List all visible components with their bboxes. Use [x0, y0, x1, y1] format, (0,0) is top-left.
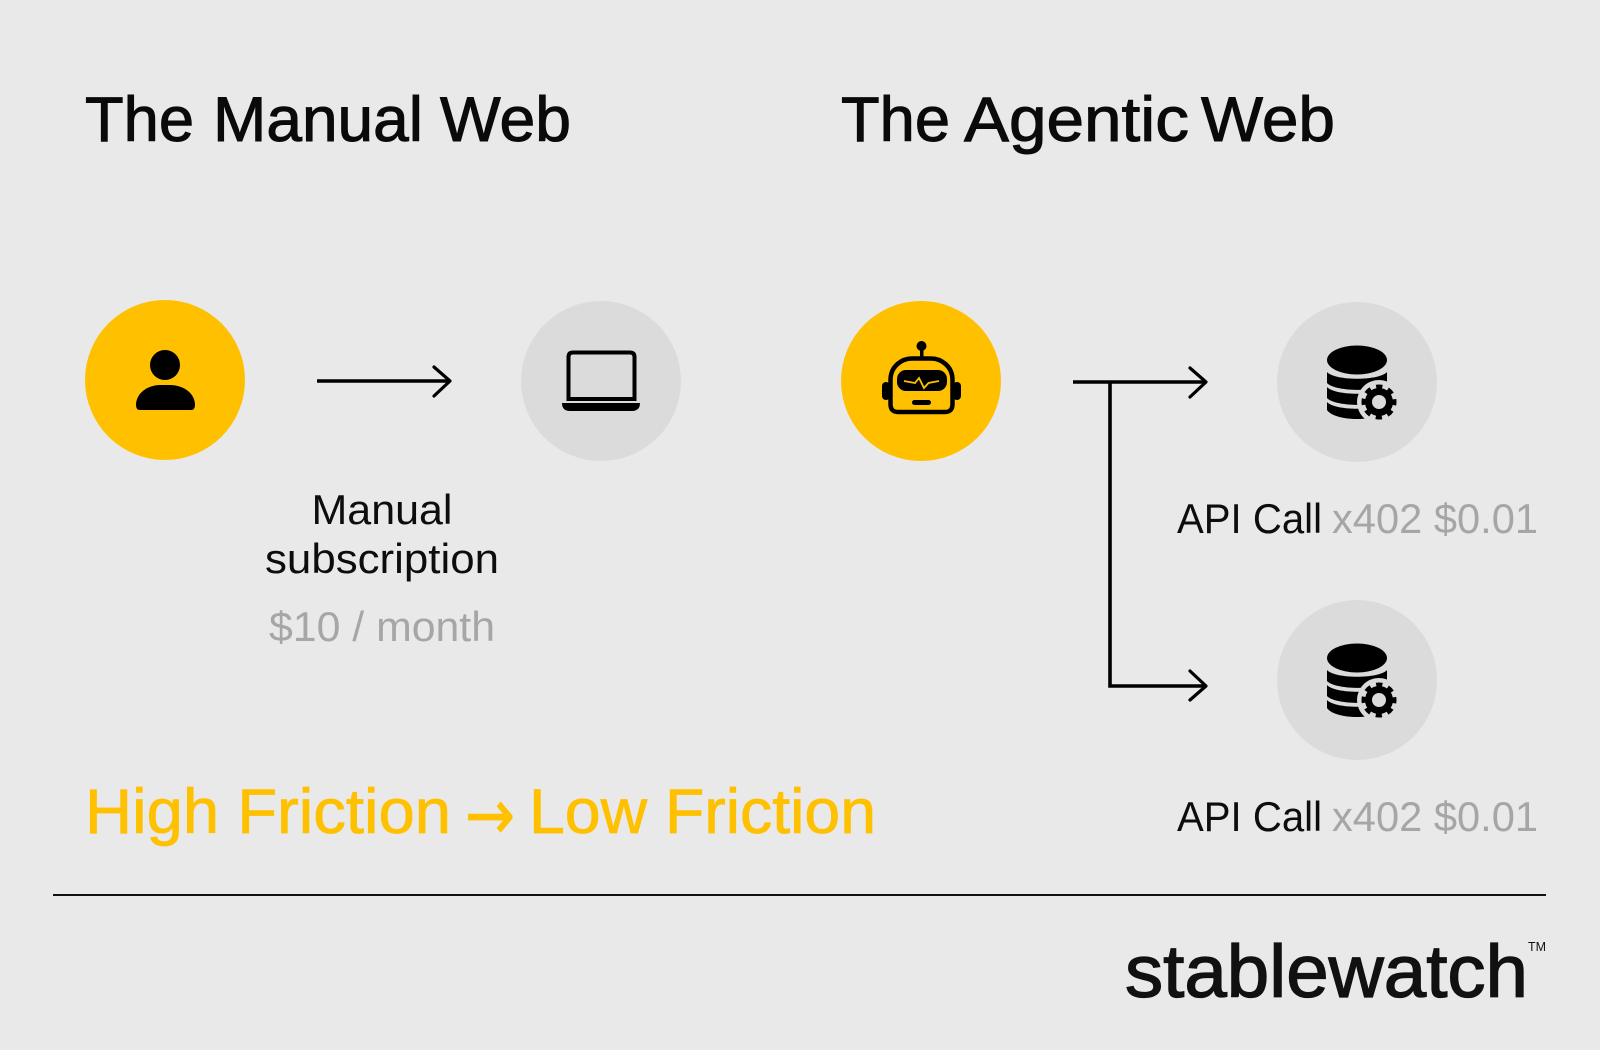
label: API call top: API Call — [1177, 495, 1322, 542]
label: API call bottom: API Call — [1177, 793, 1322, 840]
icon: database with gear, top — [1277, 302, 1437, 462]
icon: person in yellow circle — [85, 300, 245, 460]
arrow: person to laptop — [317, 367, 450, 396]
icon: laptop in grey circle — [521, 301, 681, 461]
heading: The Manual Web — [85, 85, 571, 155]
headline: High Friction to Low Friction — [85, 774, 876, 856]
headline: High Friction to Low Friction: Low Friction — [529, 777, 876, 847]
heading: The Agentic Web: Web — [1201, 85, 1335, 155]
logo: stablewatch: TM — [1528, 939, 1546, 954]
label: API call bottom: x402 $0.01 — [1332, 793, 1538, 840]
headline: High Friction to Low Friction: High Friction — [85, 777, 451, 847]
icon: database with gear, bottom — [1277, 600, 1437, 760]
heading: The Manual Web: Web — [440, 85, 571, 155]
label: manual subscription price: subscription — [265, 535, 499, 582]
heading: The Agentic Web: The — [841, 85, 950, 155]
heading: The Agentic Web: Agentic — [964, 85, 1189, 155]
label: API call top: x402 $0.01 — [1332, 495, 1538, 542]
heading: The Manual Web: The — [85, 85, 194, 155]
label: API call top — [1177, 495, 1538, 542]
icon: robot in yellow circle — [841, 301, 1001, 461]
logo: stablewatch: stablewatch — [1125, 930, 1528, 1013]
label: manual subscription price: $10 / month — [269, 603, 495, 650]
heading: The Agentic Web — [841, 85, 1335, 155]
headline: High Friction to Low Friction: → — [465, 774, 515, 856]
label: manual subscription price: Manual — [312, 486, 452, 533]
arrow: branching from robot to two databases — [1073, 368, 1206, 700]
heading: The Manual Web: Manual — [213, 85, 423, 155]
label: API call bottom — [1177, 793, 1538, 840]
label: manual subscription price — [265, 486, 499, 650]
